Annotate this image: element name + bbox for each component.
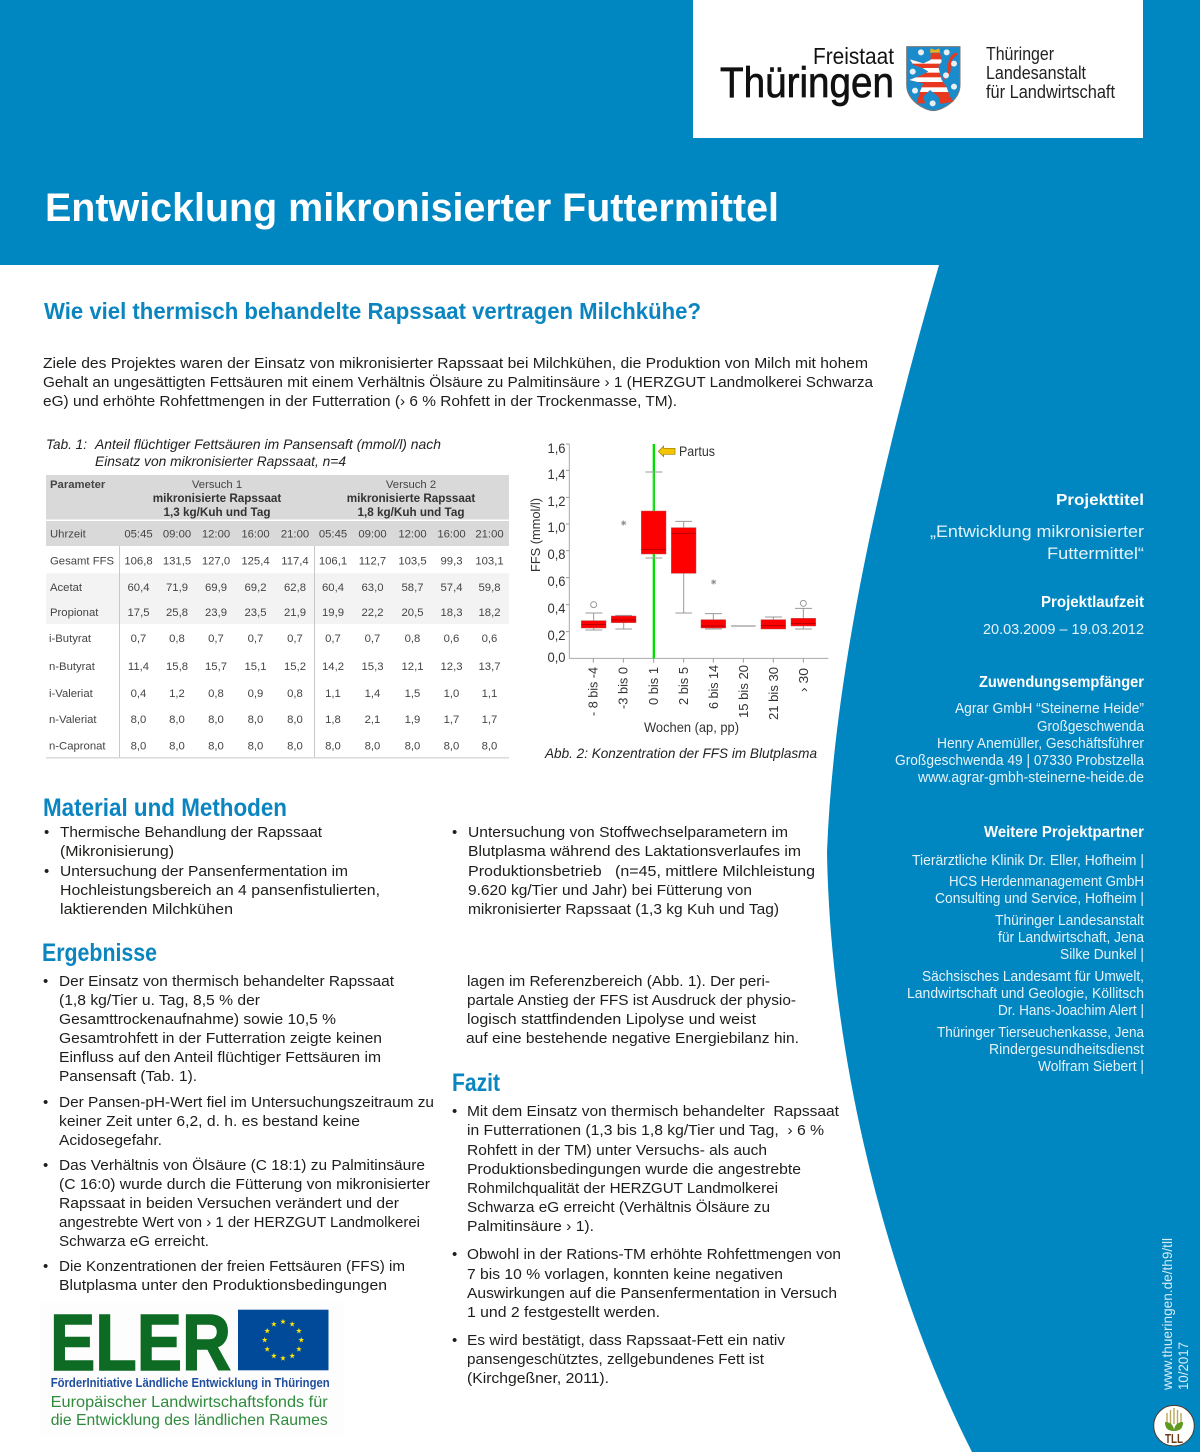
intro paragraph: eG) und erhöhte Rohfettmengen in der Futterration (› 6 % Rohfett in der Trockenmasse, TM).: [43, 393, 677, 410]
intro paragraph: Gehalt an ungesättigten Fettsäuren mit einem Verhältnis Ölsäure zu Palmitinsäure › 1 (HERZGUT Landmolkerei Schwarza: [43, 373, 874, 391]
x axis title: Wochen (ap, pp): [644, 719, 739, 735]
table row: Gesamt FFS: 99,3: [440, 556, 462, 568]
table row: n-Butyrat: 15,8: [166, 661, 188, 673]
heading: Material und Methoden: Material und Methoden: [43, 794, 287, 822]
table row: n-Capronat: 8,0: [208, 740, 224, 752]
table: volatile fatty acids: mikronisierte Rapssaat: [347, 492, 475, 505]
table: volatile fatty acids: 1,3 kg/Kuh und Tag: [164, 506, 270, 519]
sidebar: Weitere Projektpartner: Thüringer Landesanstalt: [995, 913, 1144, 929]
table row: n-Capronat: 8,0: [248, 740, 263, 752]
text block: results left: Das Verhältnis von Ölsäure (C 18:1) zu Palmitinsäure: [59, 1156, 425, 1174]
icon: EU flag: [238, 1310, 328, 1370]
text block: conclusion: Obwohl in der Rations-TM erhöhte Rohfettmengen von: [467, 1246, 841, 1263]
text block: methods left: Hochleistungsbereich an 4 pansenfistulierten,: [60, 882, 380, 899]
table row: n-Valeriat: 2,1: [365, 714, 380, 726]
icon: TLL logo: TLL: [1165, 1431, 1183, 1446]
logo: ELER and EU flag: die Entwicklung des ländlichen Raumes: [51, 1412, 328, 1429]
text block: methods right: [452, 824, 815, 918]
text block: methods left: Thermische Behandlung der Rapssaat: [60, 824, 323, 841]
table row: Uhrzeit: 05:45: [124, 528, 153, 540]
text block: methods left: [44, 824, 380, 918]
sidebar: Weitere Projektpartner: Thüringer Tierseuchenkasse, Jena: [937, 1025, 1145, 1041]
text block: results left: Die Konzentrationen der freien Fettsäuren (FFS) im: [59, 1258, 405, 1275]
x axis tick labels: 21 bis 30: [766, 667, 781, 720]
logo: ELER and EU flag: ELER: [50, 1298, 231, 1387]
text block: results left: •: [43, 1258, 48, 1275]
sidebar: Projekttitel: „Entwicklung mikronisierter: [930, 522, 1144, 541]
sidebar: Zuwendungsempfänger: Agrar GmbH “Steinerne Heide”: [955, 701, 1144, 717]
table caption: [46, 436, 441, 469]
table row: Gesamt FFS: 127,0: [202, 556, 230, 568]
sidebar: Zuwendungsempfänger: www.agrar-gmbh-steinerne-heide.de: [917, 770, 1144, 786]
table row: n-Butyrat: 12,3: [440, 661, 462, 673]
text block: conclusion: 1 und 2 festgestellt werden.: [467, 1304, 660, 1321]
table row: n-Capronat: 8,0: [169, 740, 185, 752]
table: volatile fatty acids: Versuch 1: [192, 479, 242, 491]
table row: i-Butyrat: 0,7: [365, 633, 380, 645]
sidebar: Projekttitel: [930, 492, 1144, 563]
intro paragraph: [43, 355, 874, 410]
sidebar: Zuwendungsempfänger: Henry Anemüller, Geschäftsführer: [937, 736, 1144, 752]
table row: Acetat: 58,7: [402, 582, 424, 594]
sidebar: Weitere Projektpartner: HCS Herdenmanagement GmbH: [949, 874, 1144, 890]
table row: n-Capronat: 8,0: [287, 740, 303, 752]
table row: i-Butyrat: 0,7: [208, 633, 224, 645]
table row: n-Butyrat: 15,3: [362, 661, 384, 673]
table row: n-Valeriat: 8,0: [131, 714, 146, 726]
y axis labels: 0,8: [548, 546, 566, 562]
text block: conclusion: Rohmilchqualität der HERZGUT Landmolkerei: [467, 1180, 778, 1197]
text block: methods left: •: [44, 863, 49, 880]
text block: conclusion: •: [452, 1103, 457, 1120]
table row: n-Butyrat: [49, 661, 500, 673]
text block: results left: •: [43, 1094, 48, 1111]
table row: i-Valeriat: 1,1: [482, 688, 497, 700]
x axis tick labels: › 30: [796, 668, 811, 692]
text block: results left: Blutplasma unter den Produktionsbedingungen: [59, 1277, 387, 1294]
table: volatile fatty acids: Parameter: [50, 479, 106, 491]
table row: i-Valeriat: 0,9: [248, 688, 263, 700]
text block: results left: Gesamtrohfett in der Futterration zeigte keinen: [59, 1030, 382, 1047]
figure caption: Abb. 2: Konzentration der FFS im Blutplasma: [544, 745, 817, 761]
table row: i-Valeriat: 1,1: [325, 688, 341, 700]
y axis labels: 0,2: [548, 627, 566, 643]
table row: Propionat: 20,5: [402, 607, 424, 619]
x axis tick labels: [586, 665, 811, 720]
table row: Propionat: 19,9: [322, 607, 344, 619]
table row: Acetat: [50, 582, 500, 594]
table row: n-Valeriat: 8,0: [287, 714, 303, 726]
table row: i-Butyrat: 0,6: [482, 633, 497, 645]
table row: i-Butyrat: 0,6: [444, 633, 459, 645]
sidebar: Weitere Projektpartner: Consulting und Service, Hofheim |: [935, 891, 1144, 907]
logo panel: Freistaat Thüringen / TLL: Thüringen: [720, 59, 894, 107]
text block: conclusion: (Kirchgeßner, 2011).: [467, 1370, 609, 1387]
text block: methods left: Untersuchung der Pansenfermentation im: [60, 863, 348, 880]
title: Entwicklung mikronisierter Futtermittel: [45, 186, 779, 230]
table row: Propionat: 18,2: [478, 607, 500, 619]
text block: conclusion: Es wird bestätigt, dass Rapssaat-Fett ein nativ: [467, 1332, 786, 1349]
text block: methods right: Untersuchung von Stoffwechselparametern im: [468, 824, 788, 841]
table row: n-Butyrat: 13,7: [478, 661, 500, 673]
table row: i-Valeriat: 1,4: [365, 688, 380, 700]
table row: n-Capronat: 8,0: [365, 740, 380, 752]
text block: methods right: •: [452, 824, 457, 841]
text block: results left: Rapssaat in beiden Versuchen verändert und der: [59, 1195, 399, 1212]
table row: Acetat: 63,0: [362, 582, 384, 594]
table row: n-Capronat: 8,0: [444, 740, 459, 752]
table row: Acetat: 69,2: [244, 582, 266, 594]
table row: n-Capronat: 8,0: [482, 740, 497, 752]
table row: Uhrzeit: 09:00: [358, 528, 387, 540]
table row: Acetat: 60,4: [128, 582, 150, 594]
intro paragraph: Ziele des Projektes waren der Einsatz von mikronisierter Rapssaat bei Milchkühen, die Produktion von Milch mit hohem: [43, 355, 868, 372]
x axis tick labels: 0 bis 1: [646, 667, 661, 705]
table row: Gesamt FFS: 103,1: [475, 556, 504, 568]
table row: i-Butyrat: 0,8: [169, 633, 185, 645]
table row: n-Butyrat: 12,1: [402, 661, 424, 673]
icon: coat of arms of Thuringia: [907, 47, 960, 111]
table row: Acetat: 59,8: [478, 582, 500, 594]
table row: Propionat: 22,2: [362, 607, 384, 619]
table row: n-Valeriat: 1,7: [482, 714, 497, 726]
x axis tick labels: -3 bis 0: [616, 667, 630, 709]
y axis labels: 0,6: [548, 573, 566, 589]
x axis tick labels: - 8 bis -4: [586, 667, 600, 716]
table row: n-Valeriat: 1,9: [405, 714, 420, 726]
text block: results left: Gesamttrockenaufnahme) sowie 10,5 %: [59, 1011, 336, 1028]
table row: n-Butyrat: 15,1: [244, 661, 266, 673]
table: volatile fatty acids: Versuch 2: [386, 479, 436, 491]
heading: Ergebnisse: Ergebnisse: [42, 939, 157, 967]
text block: results left: (1,8 kg/Tier u. Tag, 8,5 % der: [59, 992, 260, 1009]
table row: i-Butyrat: 0,7: [287, 633, 303, 645]
text block: methods right: mikronisierter Rapssaat (1,3 kg Kuh und Tag): [468, 901, 779, 918]
table row: Gesamt FFS: Gesamt FFS: [50, 556, 114, 568]
partus label: Partus: [679, 443, 715, 459]
text block: results left: keiner Zeit unter 6,2, d. h. es bestand keine: [59, 1113, 360, 1130]
table row: Gesamt FFS: 117,4: [281, 556, 309, 568]
sidebar: Projektlaufzeit: Projektlaufzeit: [1041, 594, 1144, 611]
sidebar: Weitere Projektpartner: Rindergesundheitsdienst: [989, 1042, 1144, 1058]
table row: Acetat: 71,9: [166, 582, 188, 594]
logo panel: Freistaat Thüringen / TLL: Landesanstalt: [986, 63, 1086, 83]
text block: conclusion: Schwarza eG erreicht (Verhältnis Ölsäure zu: [467, 1198, 770, 1216]
table row: Uhrzeit: 09:00: [163, 528, 191, 540]
sidebar: Weitere Projektpartner: Landwirtschaft und Geologie, Köllitsch: [907, 986, 1144, 1002]
text block: methods left: laktierenden Milchkühen: [60, 901, 233, 918]
text block: results left: Einfluss auf den Anteil flüchtiger Fettsäuren im: [59, 1049, 381, 1066]
table row: Acetat: 57,4: [440, 582, 462, 594]
text block: conclusion: Mit dem Einsatz von thermisch behandelter Rapssaat: [467, 1103, 840, 1120]
sidebar: Projektlaufzeit: [983, 594, 1144, 638]
text block: conclusion: Palmitinsäure › 1).: [467, 1218, 594, 1235]
table row: i-Valeriat: [49, 688, 497, 700]
table row: Gesamt FFS: 106,8: [124, 556, 153, 568]
y axis labels: 1,2: [548, 493, 566, 509]
table row: Propionat: 25,8: [166, 607, 188, 619]
table row: n-Valeriat: n-Valeriat: [49, 714, 97, 726]
text block: results right: partale Anstieg der FFS ist Ausdruck der physio-: [467, 992, 796, 1009]
text block: results left: angestrebte Wert von › 1 der HERZGUT Landmolkerei: [59, 1214, 420, 1231]
text block: conclusion: •: [452, 1246, 457, 1263]
table row: i-Butyrat: 0,7: [325, 633, 341, 645]
text block: results left: (C 16:0) wurde durch die Fütterung von mikronisierter: [59, 1176, 430, 1193]
text block: conclusion: •: [452, 1332, 457, 1349]
table row: n-Valeriat: [49, 714, 497, 726]
table row: i-Valeriat: 0,4: [131, 688, 146, 700]
table row: Uhrzeit: Uhrzeit: [50, 528, 87, 540]
x axis tick labels: 6 bis 14: [706, 665, 721, 709]
box plot: FFS concentration: [529, 440, 828, 735]
text block: results right: lagen im Referenzbereich (Abb. 1). Der peri-: [467, 973, 770, 990]
sidebar: Weitere Projektpartner: Weitere Projektpartner: [984, 824, 1144, 841]
table row: i-Butyrat: 0,8: [405, 633, 420, 645]
table caption: Anteil flüchtiger Fettsäuren im Pansensaft (mmol/l) nach: [94, 436, 441, 452]
table row: n-Capronat: 8,0: [131, 740, 146, 752]
table row: Propionat: 23,5: [244, 607, 266, 619]
logo panel: Freistaat Thüringen / TLL: für Landwirtschaft: [986, 82, 1115, 102]
table row: Acetat: 69,9: [205, 582, 227, 594]
table row: n-Valeriat: 8,0: [248, 714, 263, 726]
table row: Gesamt FFS: 106,1: [319, 556, 347, 568]
sidebar: Weitere Projektpartner: Tierärztliche Klinik Dr. Eller, Hofheim |: [912, 853, 1144, 869]
table row: n-Butyrat: 14,2: [322, 661, 344, 673]
sidebar: Zuwendungsempfänger: [895, 674, 1145, 786]
text block: conclusion: Produktionsbedingungen wurde die angestrebte: [467, 1161, 801, 1178]
text block: results left: Acidosegefahr.: [59, 1132, 162, 1149]
text block: conclusion: pansengeschütztes, zellgebundenes Fett ist: [467, 1351, 765, 1368]
y axis labels: 1,6: [548, 440, 566, 456]
text block: results right: [466, 973, 799, 1047]
icon: TLL logo: [1154, 1405, 1194, 1446]
x axis tick labels: 2 bis 5: [676, 667, 691, 705]
table row: Uhrzeit: 12:00: [202, 528, 230, 540]
table row: n-Capronat: n-Capronat: [49, 740, 106, 752]
y axis title: FFS (mmol/l): [529, 498, 543, 572]
table: volatile fatty acids: mikronisierte Rapssaat: [153, 492, 281, 505]
table row: Acetat: Acetat: [50, 582, 83, 594]
table row: Uhrzeit: 05:45: [319, 528, 347, 540]
logo: ELER and EU flag: Europäischer Landwirtschaftsfonds für: [51, 1394, 328, 1411]
table row: i-Butyrat: i-Butyrat: [49, 633, 92, 645]
table row: i-Valeriat: i-Valeriat: [49, 688, 94, 700]
text block: conclusion: [452, 1103, 841, 1387]
vertical website and date: 10/2017: [1175, 1342, 1191, 1390]
table row: n-Butyrat: 15,2: [284, 661, 306, 673]
table: volatile fatty acids: [46, 475, 509, 759]
table row: Gesamt FFS: 103,5: [398, 556, 427, 568]
table row: Gesamt FFS: 112,7: [359, 556, 386, 568]
white content panel with curved right edge: [0, 265, 972, 1452]
table row: i-Butyrat: 0,7: [131, 633, 146, 645]
y axis labels: 1,4: [548, 466, 566, 482]
table row: Gesamt FFS: 125,4: [241, 556, 270, 568]
table row: i-Valeriat: 0,8: [287, 688, 303, 700]
text block: methods right: Produktionsbetrieb (n=45, mittlere Milchleistung: [468, 863, 815, 880]
text block: results left: •: [43, 1157, 48, 1174]
text block: conclusion: 7 bis 10 % vorlagen, konnten keine negativen: [467, 1266, 783, 1283]
table row: i-Valeriat: 1,0: [444, 688, 459, 700]
table row: Propionat: [50, 607, 500, 619]
text block: methods right: 9.620 kg/Tier und Jahr) bei Fütterung von: [468, 882, 752, 899]
text block: results left: Pansensaft (Tab. 1).: [59, 1068, 197, 1085]
y axis labels: 0,0: [548, 649, 566, 665]
text block: results left: Der Pansen-pH-Wert fiel im Untersuchungszeitraum zu: [59, 1094, 434, 1111]
vertical website and date: [1159, 1238, 1191, 1391]
vertical website and date: www.thueringen.de/th9/tll: [1159, 1238, 1175, 1391]
table row: n-Butyrat: 15,7: [205, 661, 227, 673]
table caption: Tab. 1:: [46, 436, 87, 452]
sidebar: Weitere Projektpartner: Dr. Hans-Joachim Alert |: [998, 1003, 1144, 1019]
y axis labels: [548, 440, 566, 665]
text block: results left: Schwarza eG erreicht.: [59, 1233, 209, 1250]
table row: Uhrzeit: 21:00: [281, 528, 309, 540]
text block: results left: •: [43, 973, 48, 990]
subtitle: Wie viel thermisch behandelte Rapssaat vertragen Milchkühe?: [44, 298, 701, 324]
table row: Gesamt FFS: 131,5: [163, 556, 191, 568]
table row: Propionat: 18,3: [440, 607, 462, 619]
sidebar: Weitere Projektpartner: für Landwirtschaft, Jena: [998, 930, 1145, 946]
sidebar: Projekttitel: Projekttitel: [1056, 492, 1144, 509]
text block: results right: auf eine bestehende negative Energiebilanz hin.: [466, 1030, 799, 1047]
table row: Uhrzeit: 16:00: [437, 528, 466, 540]
table row: n-Capronat: [49, 740, 497, 752]
table row: n-Valeriat: 8,0: [208, 714, 224, 726]
sidebar: Projekttitel: Futtermittel“: [1047, 544, 1144, 563]
logo panel: Freistaat Thüringen / TLL: Thüringer: [986, 44, 1054, 64]
table row: i-Butyrat: 0,7: [248, 633, 263, 645]
text block: results left: Der Einsatz von thermisch behandelter Rapssaat: [59, 973, 395, 990]
table row: n-Valeriat: 1,7: [444, 714, 459, 726]
table caption: Einsatz von mikronisierter Rapssaat, n=4: [95, 453, 346, 469]
table row: Acetat: 62,8: [284, 582, 306, 594]
table row: n-Butyrat: 11,4: [128, 661, 149, 673]
table row: Propionat: 17,5: [128, 607, 150, 619]
table row: i-Valeriat: 1,2: [169, 688, 185, 700]
table row: n-Valeriat: 1,8: [325, 714, 341, 726]
table: volatile fatty acids: 1,8 kg/Kuh und Tag: [358, 506, 464, 519]
table row: n-Butyrat: n-Butyrat: [49, 661, 96, 673]
sidebar: Weitere Projektpartner: [907, 824, 1145, 1075]
text block: methods left: (Mikronisierung): [60, 843, 174, 860]
x axis tick labels: 15 bis 20: [736, 665, 751, 718]
table row: Propionat: Propionat: [50, 607, 99, 619]
logo: ELER and EU flag: FörderInitiative Ländliche Entwicklung in Thüringen: [51, 1376, 330, 1390]
sidebar: Zuwendungsempfänger: Großgeschwenda 49 | 07330 Probstzella: [895, 753, 1145, 769]
table row: Uhrzeit: 12:00: [398, 528, 427, 540]
sidebar: Weitere Projektpartner: Wolfram Siebert |: [1038, 1059, 1144, 1075]
table row: Uhrzeit: 16:00: [241, 528, 270, 540]
table row: n-Valeriat: 8,0: [169, 714, 185, 726]
table row: i-Valeriat: 0,8: [208, 688, 224, 700]
text block: results right: logisch stattfindenden Lipolyse und weist: [467, 1011, 757, 1028]
text block: conclusion: Auswirkungen auf die Pansenfermentation in Versuch: [467, 1285, 837, 1302]
sidebar: Weitere Projektpartner: Silke Dunkel |: [1060, 947, 1144, 963]
text block: methods right: Blutplasma während des Laktationsverlaufes im: [468, 843, 801, 860]
y axis labels: 0,4: [548, 600, 566, 616]
plot marks: axes, whiskers and boxes: [566, 444, 828, 663]
table row: Acetat: 60,4: [322, 582, 344, 594]
sidebar: Projektlaufzeit: 20.03.2009 – 19.03.2012: [983, 622, 1144, 638]
text block: conclusion: in Futterrationen (1,3 bis 1,8 kg/Tier und Tag, › 6 %: [467, 1122, 824, 1139]
text block: methods left: •: [44, 824, 49, 841]
sidebar: Zuwendungsempfänger: Großgeschwenda: [1037, 719, 1145, 735]
table row: Propionat: 23,9: [205, 607, 227, 619]
table row: Propionat: 21,9: [284, 607, 306, 619]
table row: n-Capronat: 8,0: [405, 740, 420, 752]
text block: results left: [43, 973, 434, 1294]
text block: conclusion: Rohfett in der TM) unter Versuchs- als auch: [467, 1142, 767, 1159]
table row: i-Butyrat: [49, 633, 497, 645]
table row: n-Capronat: 8,0: [325, 740, 341, 752]
logo panel: Freistaat Thüringen / TLL: [693, 0, 1143, 138]
table row: i-Valeriat: 1,5: [405, 688, 420, 700]
logo: ELER and EU flag: [40, 1298, 344, 1436]
sidebar: Zuwendungsempfänger: Zuwendungsempfänger: [979, 674, 1144, 691]
table row: Uhrzeit: 21:00: [475, 528, 504, 540]
logo panel: Freistaat Thüringen / TLL: Freistaat: [813, 43, 895, 69]
sidebar: Weitere Projektpartner: Sächsisches Landesamt für Umwelt,: [922, 969, 1144, 985]
table row: Uhrzeit: [50, 528, 504, 540]
y axis labels: 1,0: [548, 519, 566, 535]
heading: Fazit: Fazit: [452, 1069, 501, 1097]
table row: Gesamt FFS: [50, 556, 504, 568]
